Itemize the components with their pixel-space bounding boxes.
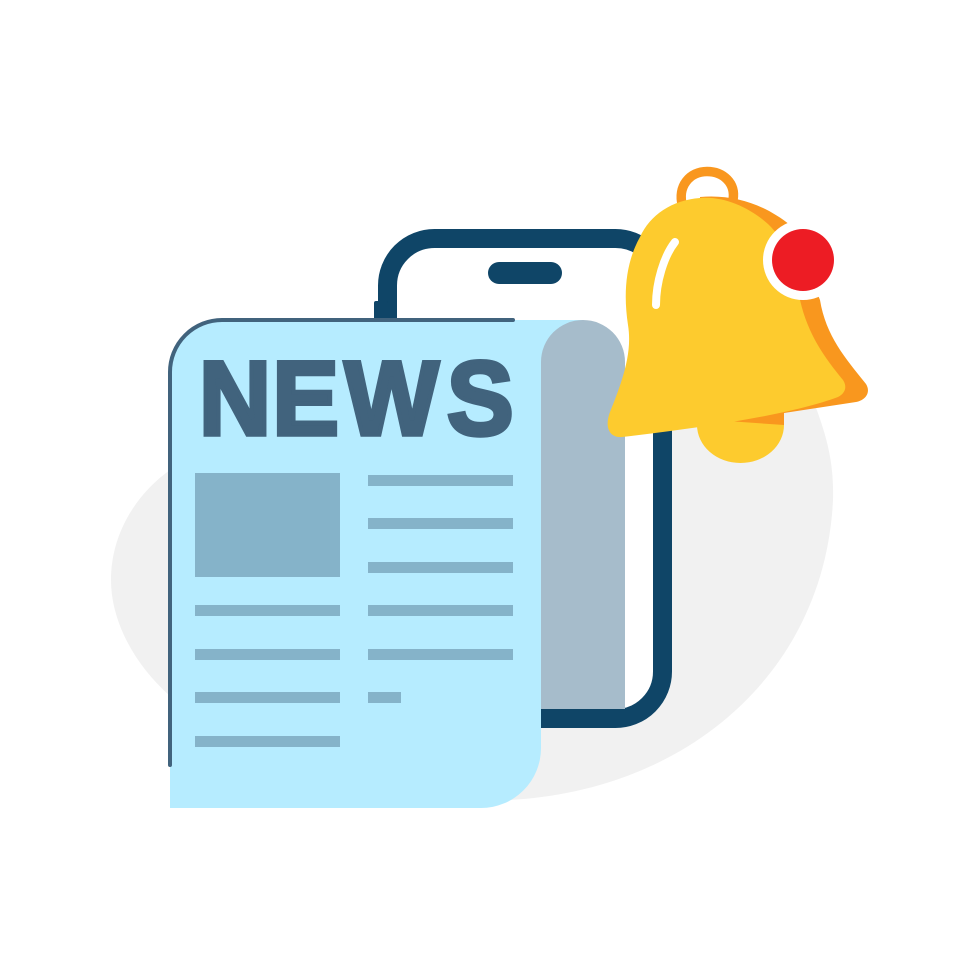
- article text lines left: [195, 605, 340, 747]
- article image placeholder: [195, 473, 340, 577]
- bell body: [608, 198, 845, 437]
- article text lines right: [368, 475, 513, 703]
- bell orange shadow: [700, 197, 868, 425]
- phone speaker pill: [488, 262, 562, 284]
- newspaper: [170, 320, 625, 808]
- newspaper outline: [170, 320, 513, 765]
- phone side button: [374, 301, 388, 323]
- background blob: [111, 300, 833, 800]
- newspaper page: [170, 320, 583, 808]
- bell highlight: [656, 242, 675, 305]
- rolled page back: [541, 320, 625, 709]
- bell handle: [681, 172, 733, 206]
- notification dot ring: [763, 220, 843, 300]
- phone: [374, 238, 662, 718]
- headline: NEWS: [199, 339, 513, 457]
- bell clapper: [697, 420, 784, 463]
- phone body: [388, 238, 662, 718]
- icon: notification bell: [608, 172, 868, 463]
- notification dot: [772, 229, 834, 291]
